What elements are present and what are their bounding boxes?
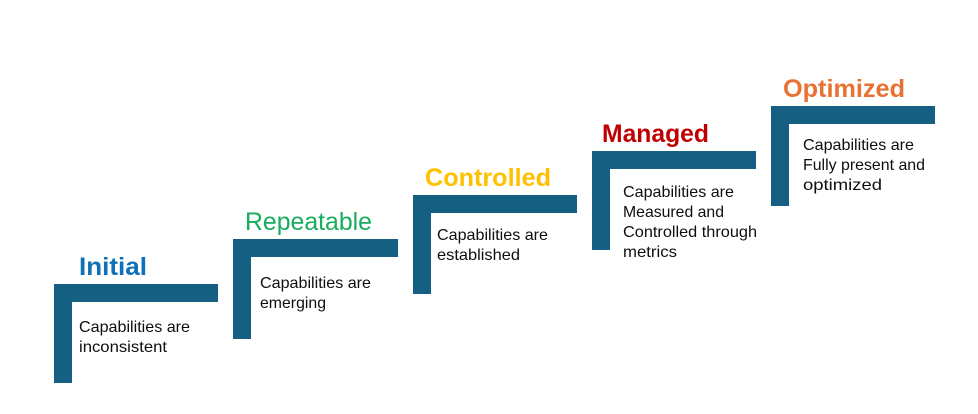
bracket: Repeatable (233, 239, 398, 339)
step 1: Initial (54, 253, 218, 383)
description: Managed: Controlled through (623, 224, 757, 241)
step 3: Controlled (413, 164, 577, 294)
description: Optimized: Capabilities are (803, 137, 914, 154)
heading: Repeatable: Repeatable (245, 208, 372, 236)
description: Controlled: established (437, 247, 520, 264)
description: Managed: Capabilities are (623, 184, 734, 201)
bracket: Initial (54, 284, 218, 383)
bracket: Optimized (771, 106, 935, 206)
heading: Initial: Initial (79, 253, 147, 281)
description: Initial (79, 319, 190, 356)
description: Controlled (437, 227, 548, 264)
heading: Managed: Managed (602, 120, 709, 148)
bracket: Controlled (413, 195, 577, 294)
step 2: Repeatable (233, 208, 398, 339)
description: Initial: inconsistent (79, 339, 168, 356)
description: Initial: Capabilities are (79, 319, 190, 336)
step 5: Optimized (771, 75, 935, 206)
bracket: Managed (592, 151, 756, 250)
description: Repeatable (260, 275, 371, 312)
heading: Optimized: Optimized (783, 75, 905, 103)
description: Managed: Measured and (623, 204, 724, 221)
description: Managed (623, 184, 757, 261)
step 4: Managed (592, 120, 757, 261)
description: Controlled: Capabilities are (437, 227, 548, 244)
description: Optimized: Fully present and (803, 157, 925, 174)
heading: Controlled: Controlled (425, 164, 551, 192)
description: Managed: metrics (623, 244, 677, 261)
description: Repeatable: emerging (260, 295, 326, 312)
description: Optimized (803, 137, 925, 194)
description: Optimized: optimized (803, 177, 882, 194)
description: Repeatable: Capabilities are (260, 275, 371, 292)
